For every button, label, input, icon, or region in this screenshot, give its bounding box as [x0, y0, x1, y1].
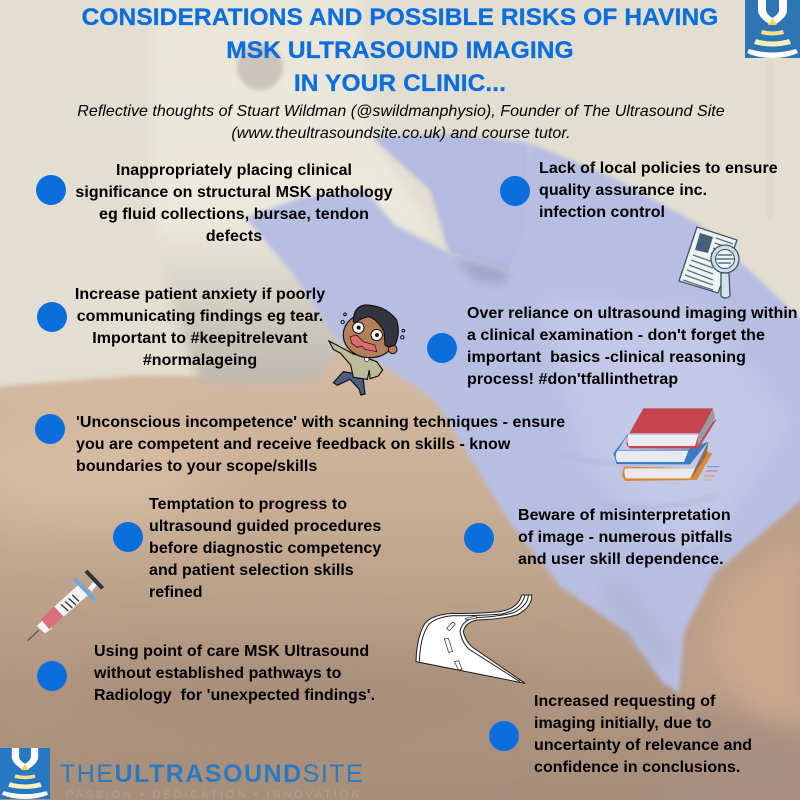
glove — [245, 135, 800, 693]
text 6: refined — [149, 584, 203, 601]
text 6: and patient selection skills — [149, 562, 354, 579]
text 6: Temptation to progress to — [149, 496, 347, 513]
bullet 9 — [489, 721, 519, 751]
text 7 — [518, 507, 732, 568]
probe — [153, 0, 445, 383]
text 8 — [94, 643, 375, 704]
text 6: ultrasound guided procedures — [149, 518, 381, 535]
text 7: and user skill dependence. — [518, 551, 724, 568]
logo wordmark: THEULTRASOUNDSITE — [60, 760, 364, 788]
text 7: of image - numerous pitfalls — [518, 529, 732, 546]
text 4 — [467, 305, 798, 388]
subtitle: (www.theultrasoundsite.co.uk) and course tutor. — [231, 125, 571, 142]
text 1 — [75, 162, 393, 245]
icon: syringe — [27, 570, 104, 641]
text 9: Increased requesting of — [534, 693, 715, 710]
text 3: Important to #keepitrelevant — [92, 330, 308, 347]
icon: document and magnifier — [678, 226, 740, 299]
text 1: Inappropriately placing clinical — [116, 162, 352, 179]
text 6: before diagnostic competency — [149, 540, 381, 557]
title: IN YOUR CLINIC... — [294, 70, 506, 97]
text 7: Beware of misinterpretation — [518, 507, 731, 524]
text 9 — [534, 693, 752, 776]
shadowed skin patches — [60, 660, 540, 740]
text 5: 'Unconscious incompetence' with scanning techniques - ensure — [76, 414, 565, 431]
bullet 5 — [35, 414, 65, 444]
text 1: defects — [206, 228, 262, 245]
text 2: infection control — [539, 204, 665, 221]
bullet 8 — [37, 661, 67, 691]
bullet 1 — [36, 175, 66, 205]
text 9: confidence in conclusions. — [534, 759, 740, 776]
subtitle: Reflective thoughts of Stuart Wildman (@swildmanphysio), Founder of The Ultrasound Site — [77, 103, 725, 120]
text 5 — [76, 414, 565, 475]
logo: top right — [745, 0, 800, 58]
text 2: Lack of local policies to ensure — [539, 160, 778, 177]
text 9: imaging initially, due to — [534, 715, 712, 732]
skin base — [0, 340, 800, 800]
text 3: #normalageing — [143, 352, 257, 369]
text 3: communicating findings eg tear. — [77, 308, 323, 325]
text 9: uncertainty of relevance and — [534, 737, 752, 754]
text 4: Over reliance on ultrasound imaging within — [467, 305, 798, 322]
bullet 4 — [427, 333, 457, 363]
text 5: you are competent and receive feedback on skills - know — [76, 436, 510, 453]
bullet 6 — [113, 522, 143, 552]
text 8: Radiology for 'unexpected findings'. — [94, 687, 375, 704]
text 6 — [149, 496, 382, 601]
text 4: a clinical examination - don't forget the — [467, 327, 765, 344]
wall — [0, 0, 800, 388]
icon: winding road — [416, 594, 532, 684]
text 8: Using point of care MSK Ultrasound — [94, 643, 369, 660]
icon: worried cartoon man — [328, 304, 406, 396]
text 2 — [539, 160, 778, 221]
text 1: significance on structural MSK pathology — [75, 184, 393, 201]
text 2: quality assurance inc. — [539, 182, 707, 199]
bullet 2 — [500, 176, 530, 206]
logo mark — [0, 748, 50, 799]
logo: bottom left — [0, 748, 364, 800]
text 1: eg fluid collections, bursae, tendon — [99, 206, 369, 223]
text 4: important basics -clinical reasoning — [467, 349, 746, 366]
right forearm skin — [679, 470, 800, 800]
text 3 — [75, 286, 325, 369]
bullet 7 — [464, 523, 494, 553]
subtitle — [77, 103, 725, 142]
text 5: boundaries to your scope/skills — [76, 458, 317, 475]
title: MSK ULTRASOUND IMAGING — [226, 37, 574, 64]
text 4: process! #don'tfallinthetrap — [467, 371, 678, 388]
title: CONSIDERATIONS AND POSSIBLE RISKS OF HAVING — [82, 4, 718, 31]
text 8: without established pathways to — [94, 665, 342, 682]
title — [82, 4, 718, 97]
icon: stack of books — [613, 408, 720, 481]
text 3: Increase patient anxiety if poorly — [75, 286, 325, 303]
bullet 3 — [37, 302, 67, 332]
